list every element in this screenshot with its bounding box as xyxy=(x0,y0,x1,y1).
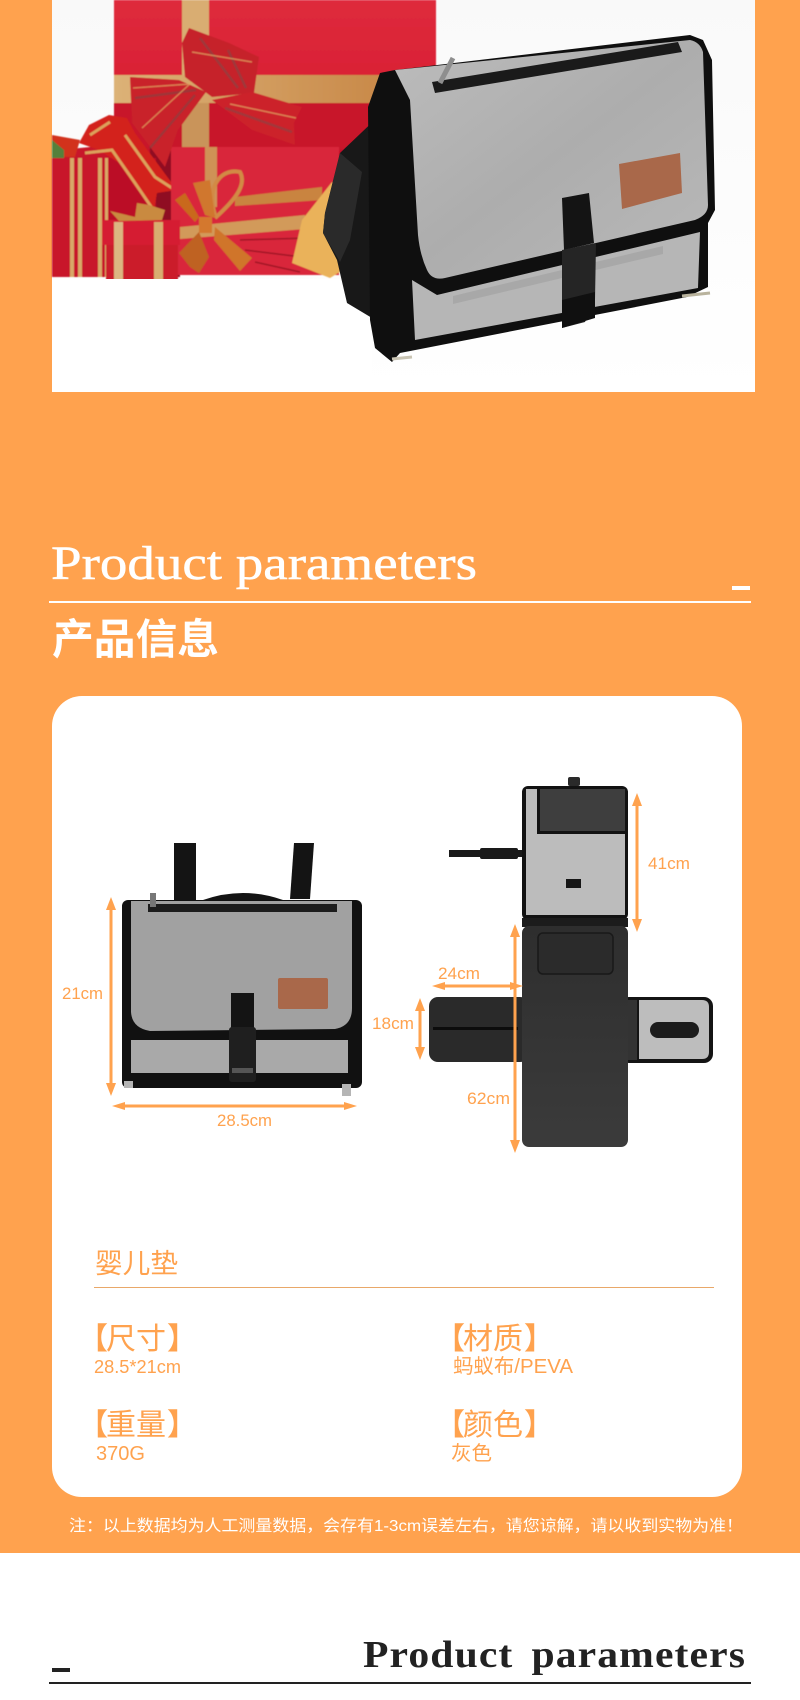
spec: weight: 370G xyxy=(96,1443,145,1465)
spec: material: 】 xyxy=(524,1323,554,1356)
leather patch xyxy=(278,978,328,1009)
dimension: 62cm: 62cm xyxy=(467,1089,510,1108)
gold flower behind bag xyxy=(292,182,348,278)
spec: colour: 灰色 xyxy=(451,1442,492,1465)
floor xyxy=(52,279,372,392)
spec: size xyxy=(78,1323,197,1377)
dimension: 28.5cm: 28.5cm xyxy=(217,1111,272,1130)
strap tab xyxy=(231,993,254,1031)
left gift box xyxy=(52,146,156,277)
title: Product parameters xyxy=(49,537,751,603)
spec: weight: 重量 xyxy=(106,1409,166,1442)
flap xyxy=(131,901,352,1031)
bag body xyxy=(122,900,362,1088)
dimension: 21cm: 21cm xyxy=(62,984,103,1003)
zipper pulls xyxy=(124,1081,351,1096)
top mesh pocket xyxy=(537,788,626,834)
black bag body xyxy=(368,35,715,362)
open bag layout xyxy=(429,777,713,1147)
zipper pulls xyxy=(392,293,710,359)
title: Product parameters: Product parameters xyxy=(51,537,477,590)
side strap xyxy=(449,848,525,859)
section title: Product parameters (dark): Product parameters xyxy=(363,1634,746,1676)
dimension: 21cm xyxy=(62,897,116,1096)
dimension: 41cm: 41cm xyxy=(648,854,690,873)
spec: material: 【 xyxy=(435,1323,465,1356)
spec: weight xyxy=(78,1409,197,1465)
dimension: 24cm: 24cm xyxy=(438,964,480,983)
small gift box xyxy=(102,203,180,282)
spec: size: 【 xyxy=(78,1323,108,1356)
spec: size: 】 xyxy=(167,1323,197,1356)
zipper xyxy=(432,42,682,93)
orange ribbon bow xyxy=(175,171,252,273)
straps xyxy=(174,843,314,901)
plaid bow xyxy=(130,28,302,167)
spec: colour xyxy=(435,1409,554,1465)
big red gift box xyxy=(114,0,436,160)
heading: 产品信息: 产品信息 xyxy=(52,616,219,663)
lower panel xyxy=(131,1040,348,1073)
section title: Product parameters (dark) xyxy=(49,1634,751,1684)
buckle xyxy=(229,1027,256,1082)
hero photo panel xyxy=(52,0,755,392)
dimension: 18cm xyxy=(372,998,425,1060)
top tab xyxy=(568,777,580,786)
dimension: 24cm xyxy=(432,964,523,990)
grey flap xyxy=(395,40,708,279)
top panel xyxy=(522,786,628,920)
dimension: 28.5cm xyxy=(112,1102,357,1130)
spec: material xyxy=(435,1323,574,1378)
closed bag front view xyxy=(122,843,362,1096)
spec: material: 蚂蚁布/PEVA xyxy=(453,1355,574,1378)
spec: material: 材质 xyxy=(463,1323,523,1356)
spec: size: 尺寸 xyxy=(106,1323,166,1356)
shadow gap between boxes xyxy=(150,147,180,277)
lower grey pocket xyxy=(412,232,700,340)
front buckle xyxy=(562,243,596,328)
right flap xyxy=(620,997,713,1063)
dimension: 41cm xyxy=(632,793,690,932)
product name: 婴儿垫: 婴儿垫 xyxy=(95,1249,178,1279)
panel: product info card xyxy=(52,696,742,1497)
hinge band xyxy=(522,918,628,927)
left flap xyxy=(429,997,529,1062)
spec: size: 28.5*21cm xyxy=(94,1357,181,1377)
middle gift box xyxy=(171,147,339,275)
leather patch xyxy=(619,153,682,209)
main pocket xyxy=(538,933,613,974)
dimension: 18cm: 18cm xyxy=(372,1014,414,1033)
spec: colour: 【 xyxy=(435,1409,465,1442)
zipper xyxy=(148,893,337,912)
small black tag xyxy=(566,879,581,888)
folded bag xyxy=(323,35,715,362)
sheer ribbon xyxy=(52,115,177,210)
spec: colour: 颜色 xyxy=(463,1409,523,1442)
spec: colour: 】 xyxy=(524,1409,554,1442)
spec: weight: 【 xyxy=(78,1409,108,1442)
dimension: 62cm xyxy=(467,924,520,1153)
side strap and buckle xyxy=(323,113,382,318)
main panel xyxy=(522,926,628,1147)
spec: weight: 】 xyxy=(167,1409,197,1442)
front strap xyxy=(562,193,594,250)
footnote: 注：以上数据均为人工测量数据，会存有1-3cm误差左右，请您谅解，请以收到实物为准！ xyxy=(69,1517,743,1535)
